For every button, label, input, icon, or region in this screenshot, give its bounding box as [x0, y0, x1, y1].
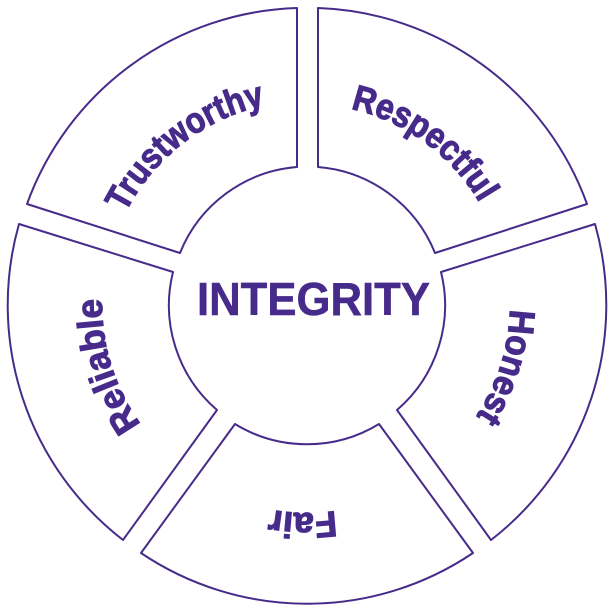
label: Reliable: Reliable — [76, 300, 140, 437]
segment: Respectful — [317, 7, 588, 254]
label: Respectful: Respectful — [352, 84, 502, 202]
label: Fair: Fair — [267, 510, 336, 539]
label: Honest: Honest — [476, 310, 536, 427]
segment: Reliable — [6, 223, 218, 541]
segment: Honest — [396, 223, 608, 541]
segment: Trustworthy — [26, 7, 298, 254]
center title: INTEGRITY: INTEGRITY — [197, 273, 430, 325]
segment: Fair — [140, 423, 474, 605]
label: Trustworthy: Trustworthy — [103, 86, 261, 208]
